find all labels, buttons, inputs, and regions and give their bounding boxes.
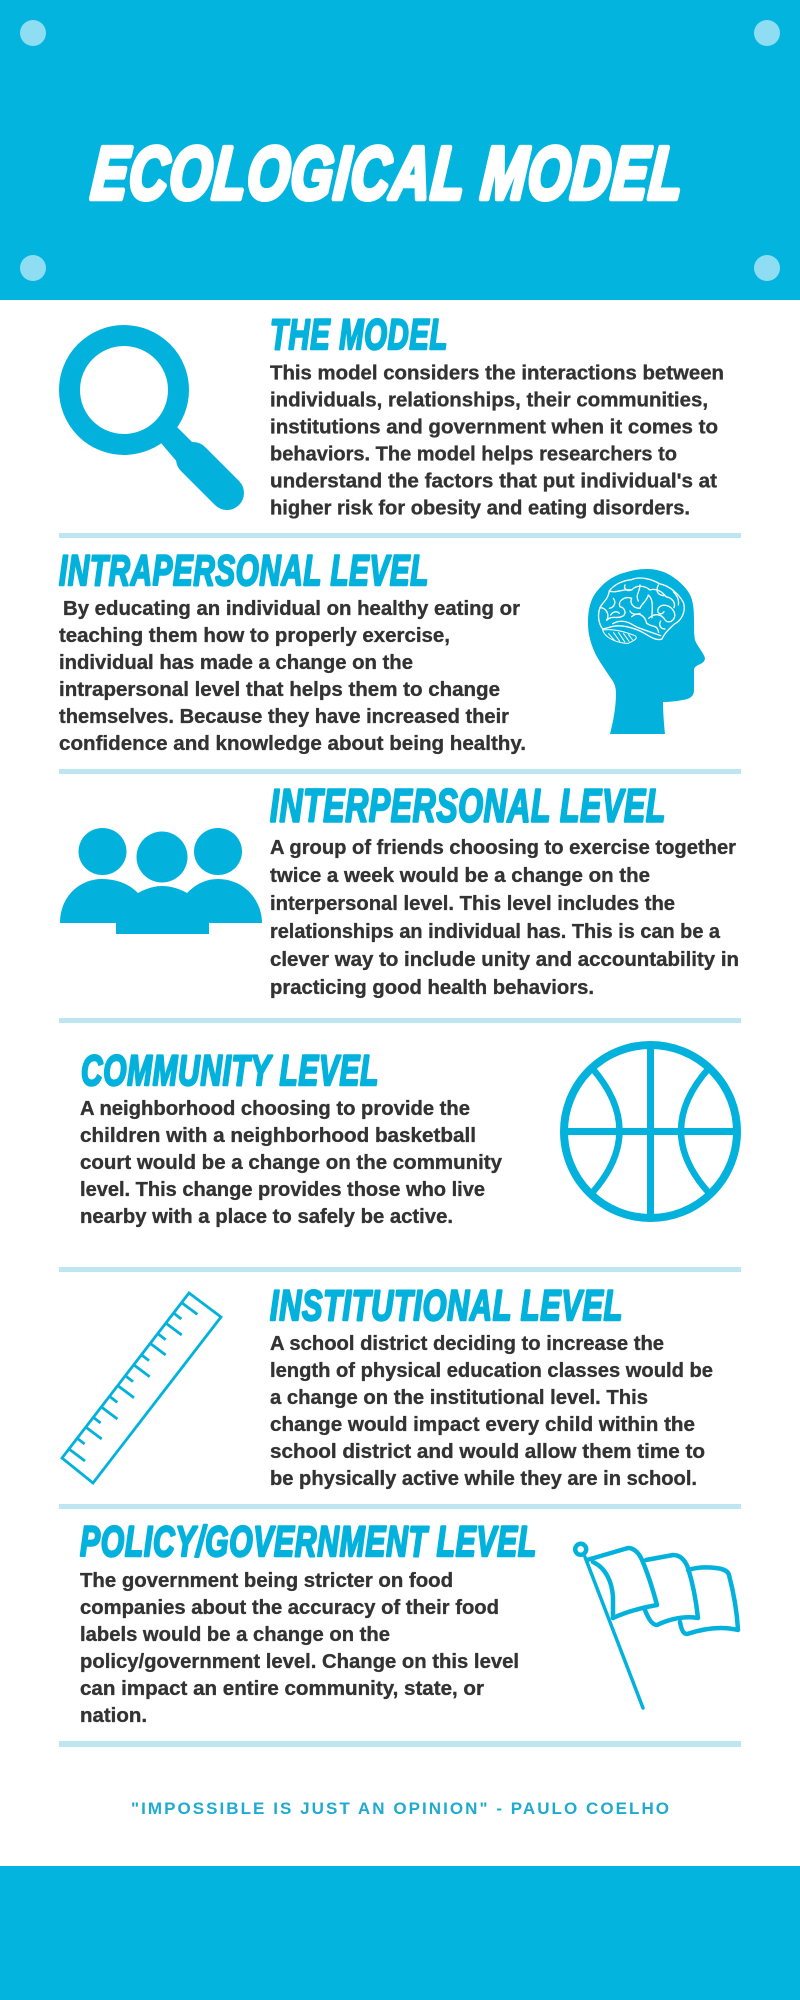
text: the model: understand the factors that put individual's at (270, 470, 717, 492)
heading: institutional level: INSTITUTIONAL LEVEL (270, 1282, 623, 1330)
quote: "IMPOSSIBLE IS JUST AN OPINION" - PAULO COELHO (131, 1799, 669, 1818)
heading: community level: COMMUNITY LEVEL (81, 1047, 379, 1095)
heading: intrapersonal level: INTRAPERSONAL LEVEL (59, 547, 429, 595)
text: the model: behaviors. The model helps researchers to (270, 442, 677, 466)
text: policy/government level (80, 1569, 519, 1727)
panel: intrapersonal level (59, 547, 705, 755)
icon: ruler (62, 1293, 221, 1483)
icon: head with brain (588, 569, 705, 734)
footer band (0, 1866, 800, 2000)
text: interpersonal level: twice a week would be a change on the (270, 864, 650, 887)
text: institutional level: school district and would allow them time to (270, 1440, 705, 1463)
panel: institutional level (62, 1282, 713, 1490)
text: community level: children with a neighborhood basketball (80, 1124, 476, 1147)
text: policy/government level: policy/government level. Change on this level (80, 1650, 519, 1673)
text: the model: individuals, relationships, their communities, (270, 388, 708, 412)
text: policy/government level: nation. (80, 1704, 147, 1727)
text: policy/government level: companies about the accuracy of their food (80, 1596, 499, 1619)
header band (0, 0, 800, 300)
text: intrapersonal level (59, 597, 526, 755)
text: community level: court would be a change on the community (80, 1151, 503, 1174)
panel: interpersonal level (60, 780, 739, 999)
text: intrapersonal level: themselves. Because they have increased their (59, 705, 509, 728)
text: interpersonal level: interpersonal level. This level includes the (270, 892, 675, 915)
text: community level: nearby with a place to safely be active. (80, 1205, 453, 1228)
panel: policy/government level (80, 1518, 738, 1727)
heading: policy/government level: POLICY/GOVERNMENT LEVEL (80, 1518, 537, 1566)
text: the model: higher risk for obesity and eating disorders. (270, 496, 690, 520)
icon: basketball (564, 1045, 737, 1218)
text: policy/government level: can impact an entire community, state, or (80, 1677, 484, 1700)
icon: magnifying glass (70, 336, 227, 493)
text: community level (80, 1097, 503, 1228)
text: the model (270, 362, 724, 520)
text: the model: This model considers the interactions between (270, 362, 724, 384)
text: the model: institutions and government when it comes to (270, 416, 718, 438)
text: intrapersonal level: teaching them how to properly exercise, (59, 624, 450, 647)
text: interpersonal level: A group of friends choosing to exercise together (270, 836, 736, 859)
text: community level: level. This change provides those who live (80, 1178, 485, 1201)
text: intrapersonal level: intrapersonal level that helps them to change (59, 678, 500, 701)
text: community level: A neighborhood choosing to provide the (80, 1097, 470, 1120)
text: interpersonal level: practicing good health behaviors. (270, 976, 594, 999)
panel: community level (80, 1045, 737, 1228)
icon: flag (575, 1544, 738, 1708)
text: interpersonal level: clever way to include unity and accountability in (270, 948, 739, 971)
text: institutional level: change would impact every child within the (270, 1413, 695, 1436)
text: intrapersonal level: confidence and knowledge about being healthy. (59, 732, 526, 755)
panel: the model (70, 311, 724, 520)
text: institutional level: be physically active while they are in school. (270, 1467, 697, 1490)
text: intrapersonal level: By educating an individual on healthy eating or (63, 597, 520, 620)
text: interpersonal level: relationships an individual has. This is can be a (270, 920, 721, 943)
text: institutional level (270, 1332, 713, 1490)
text: policy/government level: labels would be a change on the (80, 1623, 390, 1646)
text: institutional level: A school district deciding to increase the (270, 1332, 664, 1355)
icon: three people (60, 828, 262, 934)
text: policy/government level: The government being stricter on food (80, 1569, 453, 1592)
text: institutional level: a change on the institutional level. This (270, 1386, 648, 1409)
text: intrapersonal level: individual has made a change on the (59, 651, 413, 674)
text: interpersonal level (270, 836, 739, 999)
heading: the model: THE MODEL (270, 311, 448, 359)
text: institutional level: length of physical education classes would be (270, 1359, 713, 1382)
